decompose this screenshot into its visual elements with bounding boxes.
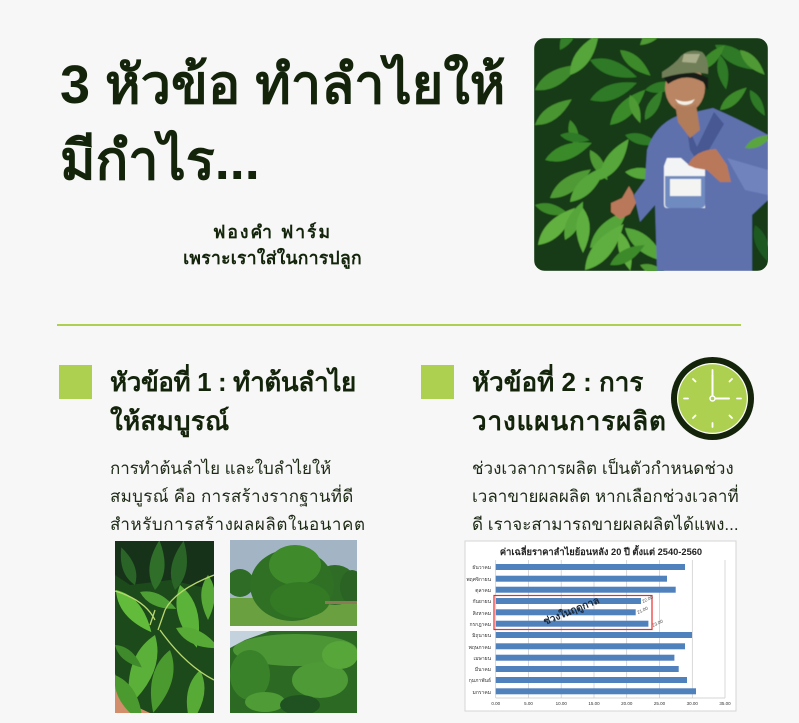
- month labels: กุมภาพันธ์: [469, 677, 491, 684]
- month labels: มิถุนายน: [472, 632, 492, 639]
- bottle: [664, 158, 705, 208]
- highlight: rainy season callout: 21.00: [636, 605, 649, 615]
- divider line: [57, 324, 741, 326]
- month labels: ธันวาคม: [472, 565, 491, 571]
- text: topic 2: ดี เราจะสามารถขายผลผลิตได้แพง...: [472, 515, 739, 534]
- heading: topic 1: [110, 364, 356, 438]
- photo: longan tree canopy: [230, 631, 357, 713]
- heading: topic 2: [472, 364, 667, 436]
- highlight: rainy season callout: 22.00: [641, 594, 654, 604]
- photo: farmer holding product bottle: [534, 38, 768, 271]
- text: topic 2: ช่วงเวลาการผลิต เป็นตัวกำหนดช่วง: [472, 459, 734, 478]
- bars: [496, 564, 696, 694]
- month labels: [466, 565, 492, 696]
- month labels: กันยายน: [472, 599, 492, 605]
- shirt: [634, 108, 768, 271]
- text: topic 1: การทำต้นลำไย และใบลำไยให้: [110, 459, 331, 478]
- axis labels: 15.00: [588, 701, 600, 706]
- heading: topic 2: วางแผนการผลิต: [472, 406, 667, 436]
- axis labels: 35.00: [719, 701, 731, 706]
- highlight: rainy season callout: ช่วงในฤดูกาล: [541, 593, 602, 629]
- text: topic 2: [472, 458, 739, 534]
- axis labels: 30.00: [687, 701, 698, 706]
- month labels: มกราคม: [473, 690, 491, 696]
- axis labels: 5.00: [524, 701, 533, 706]
- subtitle: [183, 222, 362, 269]
- thumb hand: [611, 186, 636, 219]
- title: มีกำไร...: [60, 131, 260, 191]
- highlight: rainy season callout: 23.00: [651, 618, 664, 628]
- axis labels: 10.00: [556, 701, 567, 706]
- subtitle: เพราะเราใส่ในการปลูก: [183, 248, 362, 268]
- month labels: เมษายน: [474, 656, 492, 662]
- icon: green square 2: [421, 365, 454, 399]
- text: topic 1: สมบูรณ์ คือ การสร้างรากฐานที่ดี: [110, 487, 354, 506]
- heading: topic 1: หัวข้อที่ 1 : ทำต้นลำไย: [110, 367, 356, 397]
- heading: topic 2: หัวข้อที่ 2 : การ: [472, 367, 643, 397]
- axis labels: 0.00: [491, 701, 501, 706]
- month labels: กรกฎาคม: [469, 622, 491, 628]
- text: topic 1: [110, 458, 366, 534]
- holding hand: [688, 149, 731, 182]
- icon: clock: [671, 357, 754, 440]
- month labels: สิงหาคม: [473, 610, 491, 617]
- month labels: มีนาคม: [475, 666, 491, 673]
- axis labels: 20.00: [621, 701, 633, 706]
- axis labels: 25.00: [654, 701, 666, 706]
- axis labels: [491, 701, 731, 706]
- bar chart: average longan prices: [464, 540, 736, 712]
- month labels: พฤศจิกายน: [466, 576, 492, 583]
- photo: longan leaves close-up: [115, 541, 214, 713]
- chart title: ค่าเฉลี่ยราคาลำไยย้อนหลัง 20 ปี ตั้งแต่ 2540-2560: [500, 544, 702, 557]
- heading: topic 1: ให้สมบูรณ์: [110, 406, 230, 436]
- icon: green square 1: [59, 365, 92, 399]
- cap: [662, 51, 708, 78]
- subtitle: ฟองคำ ฟาร์ม: [213, 222, 332, 242]
- photo: longan tree in orchard: [230, 540, 357, 626]
- text: topic 2: เวลาขายผลผลิต หากเลือกช่วงเวลาที่: [472, 487, 739, 506]
- text: topic 1: สำหรับการสร้างผลผลิตในอนาคต: [110, 515, 366, 534]
- face: [664, 72, 706, 110]
- title: [60, 54, 505, 191]
- month labels: ตุลาคม: [475, 588, 491, 594]
- title: 3 หัวข้อ ทำลำไยให้: [60, 55, 505, 115]
- highlight: rainy season callout: [494, 593, 664, 630]
- month labels: พฤษภาคม: [469, 645, 491, 651]
